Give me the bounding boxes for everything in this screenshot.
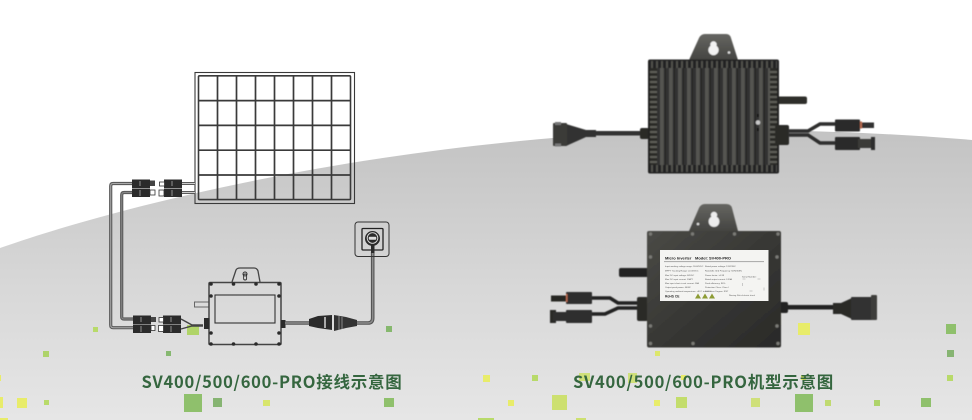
- product photo: inverter label view: [550, 204, 877, 348]
- product label: Output peak power: 400W: [665, 286, 691, 289]
- DC leads and connectors: [550, 292, 648, 323]
- heading: wiring diagram: SV400/500/600-PRO接线示意图: [142, 369, 402, 393]
- background: grey curved area: [0, 130, 972, 420]
- product label: Rated power voltage: 120/230V: [705, 265, 736, 268]
- product label: Model: SV400-PRO: [695, 256, 731, 260]
- DC stub: [775, 96, 807, 104]
- DC leads and connectors: [775, 120, 875, 150]
- product label: Operating ambient temperature: -40°C to +65°C: [665, 290, 712, 293]
- product label: Micro Inverter: [665, 256, 692, 260]
- wall socket: [355, 222, 389, 256]
- AC cable and plug connector: [285, 252, 373, 331]
- product label: [660, 250, 768, 301]
- heading: product view: SV400/500/600-PRO机型示意图: [573, 369, 834, 393]
- product label: Protection Class: Class I: [705, 286, 729, 289]
- mounting bracket: [689, 34, 738, 60]
- solar panel: [195, 72, 354, 204]
- product label: Peak efficiency: 96%: [705, 283, 725, 285]
- product label: Power factor: >0.99: [705, 274, 725, 277]
- product label: Serial Number:: [742, 276, 757, 278]
- DC cables: [111, 184, 195, 328]
- product photo: inverter back view: [553, 34, 875, 174]
- product label: Max DC input voltage: 60VDC: [665, 274, 695, 277]
- product label: Rated AC Grid Frequency: 50Hz/60Hz: [705, 270, 742, 272]
- product label: Input working voltage range: 18-60VDC: [665, 265, 704, 268]
- product label: Max input short circuit current: 18A: [665, 282, 699, 285]
- product label: Max DC input current: 13A*2: [665, 278, 694, 281]
- product label: Enclosure Degree: IP67: [705, 290, 729, 293]
- AC lead and plug: [778, 295, 877, 320]
- bottom connectors: [133, 316, 203, 333]
- decorative green and yellow squares: [0, 323, 956, 420]
- product label: MPPT Tracking Range: 22-55VDC: [665, 270, 699, 272]
- product label: RoHS CE: [665, 294, 680, 298]
- inverter outline: [194, 268, 286, 346]
- AC lead and plug: [553, 122, 649, 146]
- enclosure: [647, 231, 781, 348]
- heat-sink body: [648, 60, 779, 174]
- product label: Warning: Risk of electric shock: [729, 294, 755, 297]
- DC stub: [619, 268, 649, 277]
- mounting bracket: [689, 204, 738, 231]
- wiring diagram: [111, 72, 389, 346]
- top connectors: [132, 180, 182, 197]
- product label: Rated output current: 3.33A: [705, 278, 732, 281]
